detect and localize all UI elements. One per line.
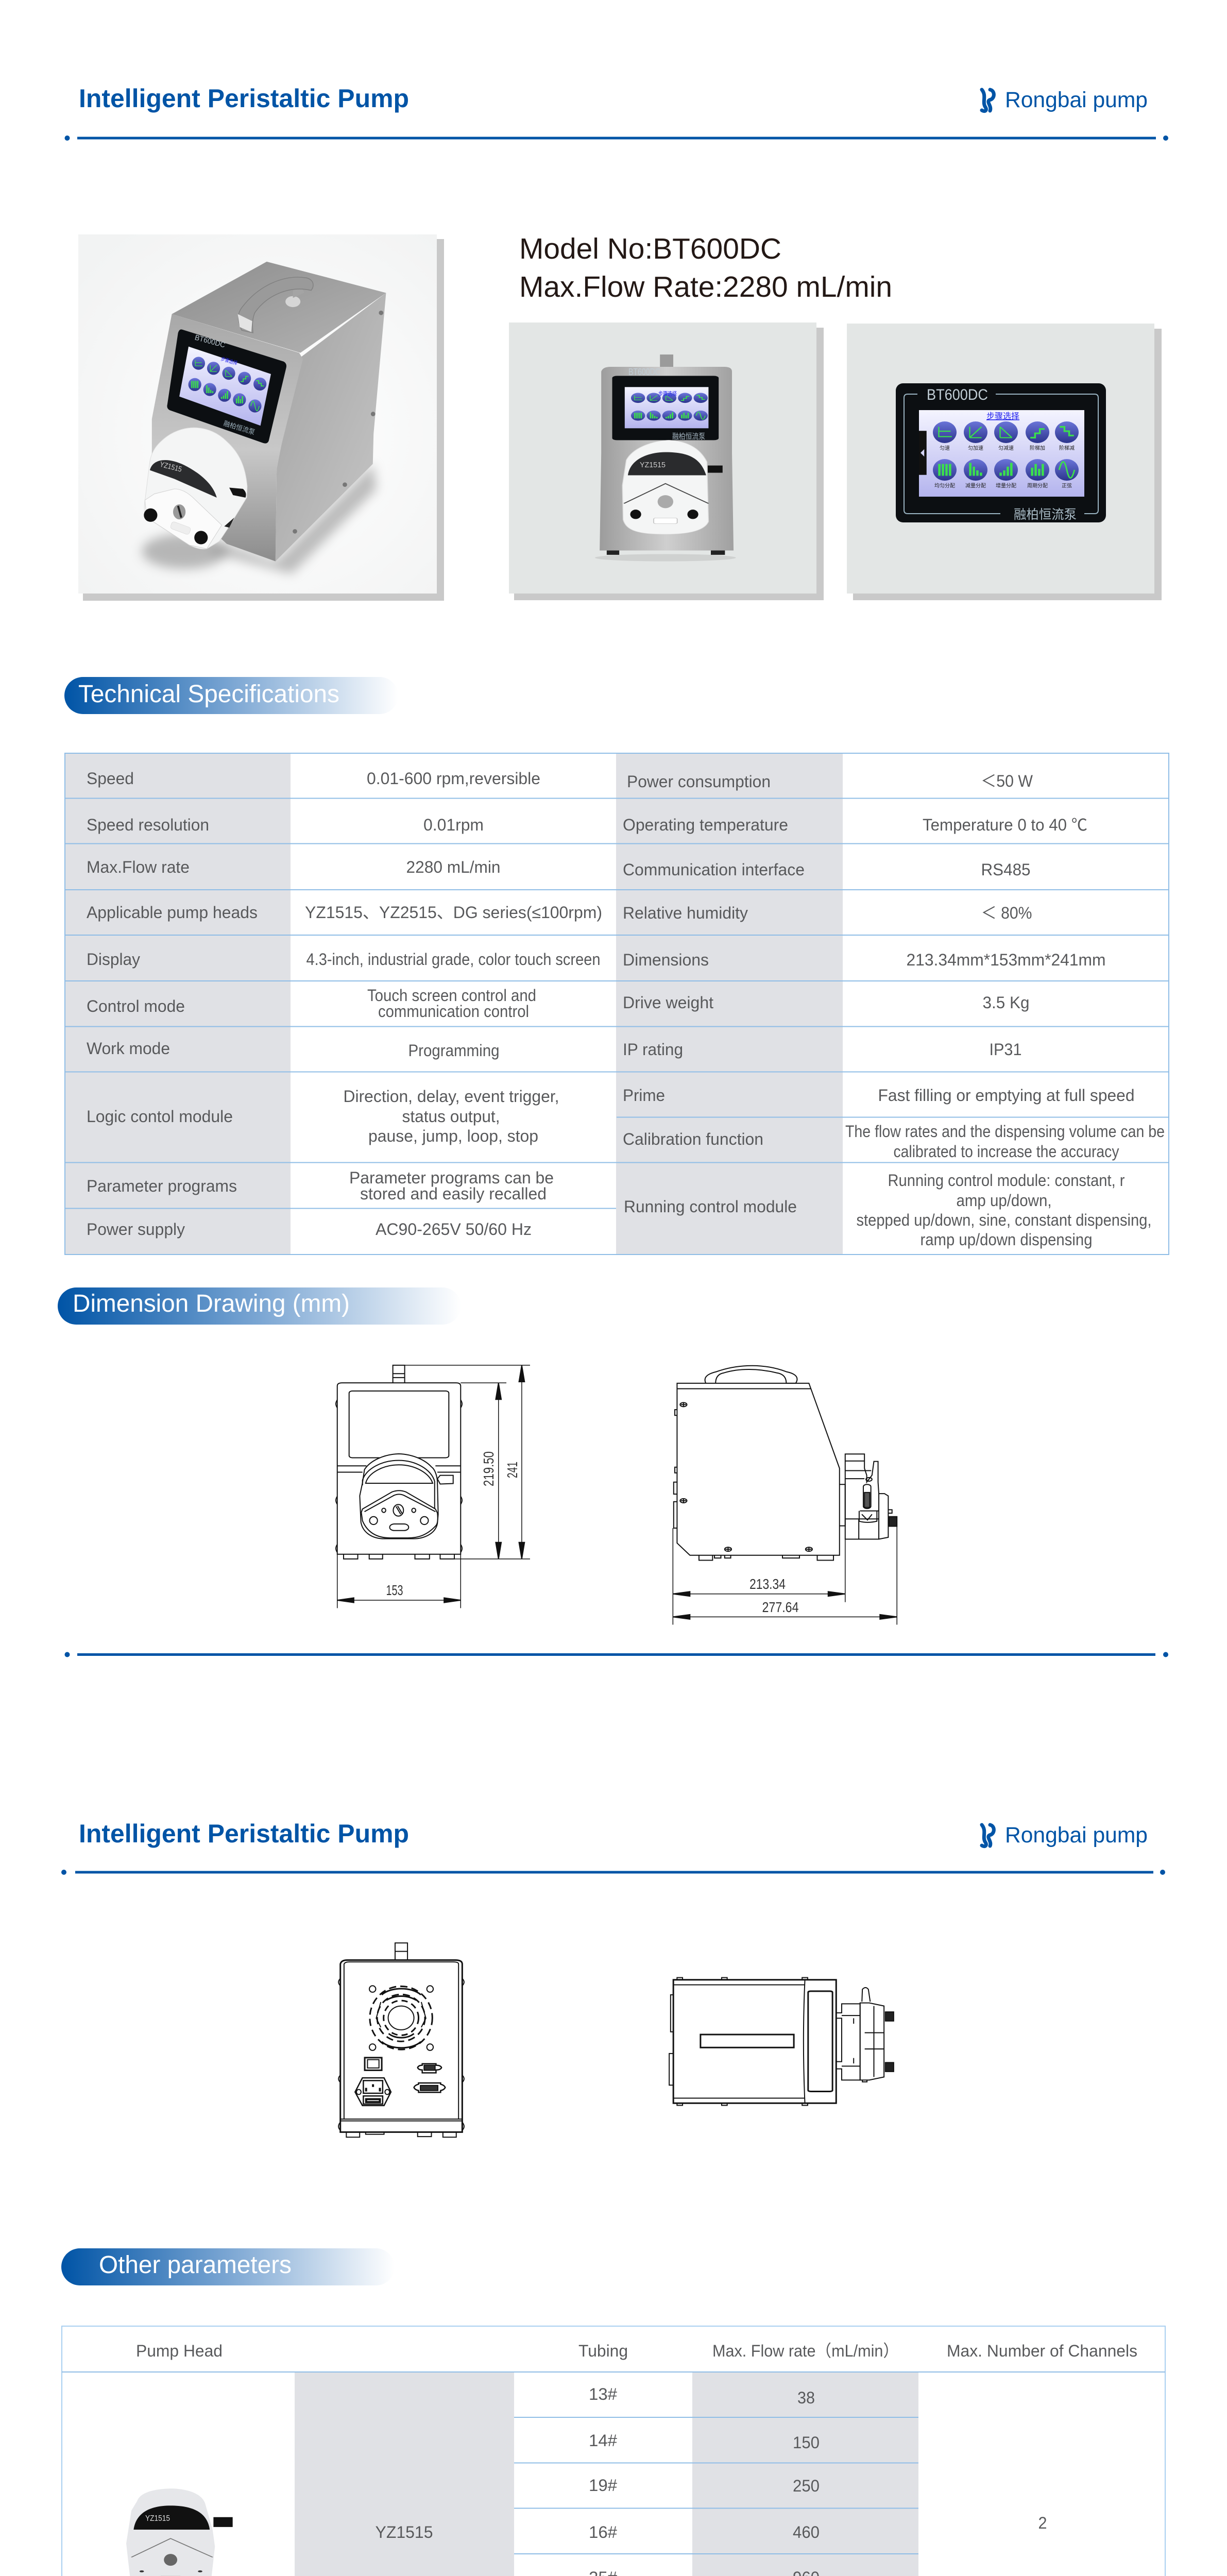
table header row: Pump Head	[136, 2342, 223, 2360]
right column labels: Prime	[623, 1086, 665, 1105]
screen icon labels: 周期分配	[1027, 483, 1048, 489]
chart: top view drawing	[669, 1978, 894, 2105]
title: Intelligent Peristaltic Pump	[79, 84, 409, 113]
right column values: The flow rates and the dispensing volume can be	[845, 1122, 1165, 1141]
screen icon labels	[934, 445, 1075, 489]
max flow rate: Max.Flow Rate:2280 mL/min	[519, 270, 892, 303]
table: other parameters	[62, 2326, 1165, 2576]
left column labels	[87, 769, 258, 1239]
title: Intelligent Peristaltic Pump	[79, 1819, 409, 1848]
illustration: BT600DC pump angled view: YZ1515	[159, 461, 183, 474]
header: second page header	[61, 1819, 1165, 1875]
right column values: RS485	[981, 860, 1030, 879]
right column values: ＜50 W	[981, 772, 1033, 790]
flow rate column: 150	[793, 2433, 820, 2452]
screen title: 步骤选择	[986, 412, 1019, 421]
screen icon labels: 阶梯加	[1030, 445, 1045, 451]
display model: BT600DC	[927, 386, 988, 403]
right column labels: Dimensions	[623, 951, 709, 969]
header rule	[65, 135, 1168, 141]
illustration: BT600DC pump angled view	[142, 262, 386, 574]
right column values: amp up/down,	[956, 1191, 1052, 1210]
screen icon labels: 增量分配	[996, 482, 1016, 489]
icon: YZ1515 pump head	[126, 2488, 233, 2576]
left column values: status output,	[402, 1107, 500, 1126]
right column values: stepped up/down, sine, constant dispensing,	[856, 1211, 1152, 1229]
screen icon labels: 阶梯减	[1059, 445, 1075, 451]
model: Model No:BT600DC	[519, 232, 781, 265]
channels column: 2	[1038, 2514, 1047, 2532]
brand name: Rongbai pump	[1005, 88, 1148, 112]
chart: side dimension drawing	[673, 1366, 897, 1625]
flow rate column: 460	[793, 2523, 820, 2541]
left column values: Programming	[408, 1041, 500, 1060]
right column values: Temperature 0 to 40 ℃	[923, 816, 1087, 834]
LCD screen	[919, 410, 1084, 497]
left column labels: Power supply	[87, 1220, 185, 1239]
illustration: BT600DC pump angled view: 步骤选择	[220, 355, 238, 366]
screen icon labels: 匀减速	[998, 445, 1014, 451]
left column values: Parameter programs can be	[349, 1168, 554, 1187]
left column values: 0.01rpm	[423, 816, 484, 834]
header: first page header	[65, 84, 1168, 141]
screen icon labels: 匀加速	[968, 445, 983, 451]
footer rule: first page	[65, 1652, 1168, 1657]
model number text	[519, 232, 892, 303]
left column labels: Logic contol module	[87, 1107, 233, 1126]
left column labels: Work mode	[87, 1039, 170, 1058]
icon: Rongbai logo	[982, 1825, 994, 1846]
tubing column: 13#	[589, 2385, 617, 2403]
screen icon labels: 减量分配	[965, 483, 986, 489]
display brand: 融柏恒流泵	[1014, 507, 1077, 522]
left column values: 2280 mL/min	[406, 858, 501, 876]
left column labels: Applicable pump heads	[87, 903, 258, 922]
screen icon labels: 均匀分配	[934, 483, 955, 489]
left column values: 0.01-600 rpm,reversible	[367, 769, 540, 788]
screen icon grid	[933, 421, 1079, 481]
left column labels: Max.Flow rate	[87, 858, 190, 876]
table: technical specifications	[64, 753, 1169, 1255]
right column labels: Running control module	[624, 1197, 797, 1216]
label: brand on panel: 融柏恒流泵	[672, 432, 705, 441]
label: model on panel: BT600DC	[628, 367, 660, 377]
heading band: Dimension Drawing	[58, 1287, 461, 1325]
table header row	[136, 2342, 1137, 2360]
left column values: pause, jump, loop, stop	[368, 1127, 538, 1145]
left column labels: Parameter programs	[87, 1177, 237, 1195]
screen icon labels: 正弦	[1062, 482, 1072, 489]
illustration: BT600DC pump angled view: BT600DC	[194, 333, 226, 350]
right column values	[845, 772, 1165, 1249]
screen side tab	[919, 431, 926, 474]
right column values: calibrated to increase the accuracy	[893, 1142, 1119, 1161]
header rule	[61, 1870, 1165, 1875]
left column labels: Control mode	[87, 997, 185, 1015]
illustration: BT600DC pump angled view: 融柏恒流泵	[223, 419, 256, 436]
right column values: Running control module: constant, r	[888, 1171, 1125, 1190]
left column values: YZ1515、YZ2515、DG series(≤100rpm)	[305, 903, 602, 922]
dimension 277.64: 277.64	[762, 1599, 798, 1615]
illustration: pump front	[595, 354, 736, 562]
heading band: Other parameters: Other parameters	[99, 2251, 292, 2279]
right column values: IP31	[989, 1040, 1022, 1059]
right column values: 3.5 Kg	[983, 993, 1029, 1012]
right column labels: IP rating	[623, 1040, 683, 1059]
left column values: AC90-265V 50/60 Hz	[376, 1220, 532, 1239]
brand name: Rongbai pump	[1005, 1823, 1148, 1848]
left column values: 4.3-inch, industrial grade, color touch screen	[306, 950, 601, 969]
label: head model: YZ1515	[640, 461, 666, 469]
left column labels: Speed	[87, 769, 134, 788]
icon: YZ1515 pump head: YZ1515	[145, 2514, 170, 2523]
panel: touch screen photo	[847, 324, 1162, 600]
panel: front view photo	[509, 323, 824, 600]
left column values: communication control	[378, 1002, 529, 1021]
dimension 219.50: 219.50	[481, 1451, 497, 1486]
heading band: Technical Specifications	[64, 677, 398, 714]
flow rate column: 38	[797, 2388, 815, 2407]
left column values	[305, 769, 602, 1239]
heading band: Dimension Drawing: Dimension Drawing (mm)	[73, 1290, 350, 1317]
dimension 213.34: 213.34	[749, 1576, 786, 1592]
display bezel	[896, 383, 1106, 522]
heading band: Other parameters	[61, 2248, 395, 2285]
right column values: 213.34mm*153mm*241mm	[907, 951, 1105, 969]
right column labels: Power consumption	[627, 772, 771, 791]
chart: front dimension drawing	[336, 1365, 530, 1608]
right column values: Fast filling or emptying at full speed	[878, 1086, 1134, 1105]
left column labels: Speed resolution	[87, 816, 209, 834]
dimension 153: 153	[386, 1582, 403, 1598]
tubing column: 14#	[589, 2431, 617, 2450]
right column labels: Relative humidity	[623, 904, 748, 922]
screen icon labels: 匀速	[940, 445, 950, 451]
tubing column: 19#	[589, 2476, 617, 2495]
panel: product 3D photo	[78, 234, 444, 601]
right column labels: Operating temperature	[623, 816, 788, 834]
table header row: Tubing	[578, 2342, 628, 2360]
tubing column: 16#	[589, 2523, 617, 2541]
table header row: Max. Flow rate（mL/min）	[712, 2342, 899, 2360]
label: screen title: 步骤选择	[658, 390, 677, 397]
left column labels: Display	[87, 950, 140, 969]
icon: Rongbai logo	[982, 90, 994, 111]
flow rate column	[788, 2388, 824, 2576]
pump head models: YZ1515	[375, 2523, 433, 2541]
left column values: Touch screen control and	[367, 986, 536, 1005]
tubing column	[517, 2385, 689, 2576]
right column values: ＜ 80%	[981, 904, 1032, 922]
right column values: ramp up/down dispensing	[920, 1230, 1092, 1249]
dimension 241: 241	[504, 1462, 520, 1478]
chart: back view drawing	[338, 1943, 464, 2137]
right column labels	[623, 772, 805, 1216]
table header row: Max. Number of Channels	[947, 2342, 1137, 2360]
left column values: Direction, delay, event trigger,	[343, 1087, 559, 1106]
right column labels: Communication interface	[623, 860, 805, 879]
right column labels: Drive weight	[623, 993, 713, 1012]
heading band: Technical Specifications: Technical Specifications	[78, 681, 339, 708]
left column values: stored and easily recalled	[360, 1184, 547, 1203]
flow rate column: 250	[793, 2477, 820, 2495]
right column labels: Calibration function	[623, 1130, 763, 1148]
